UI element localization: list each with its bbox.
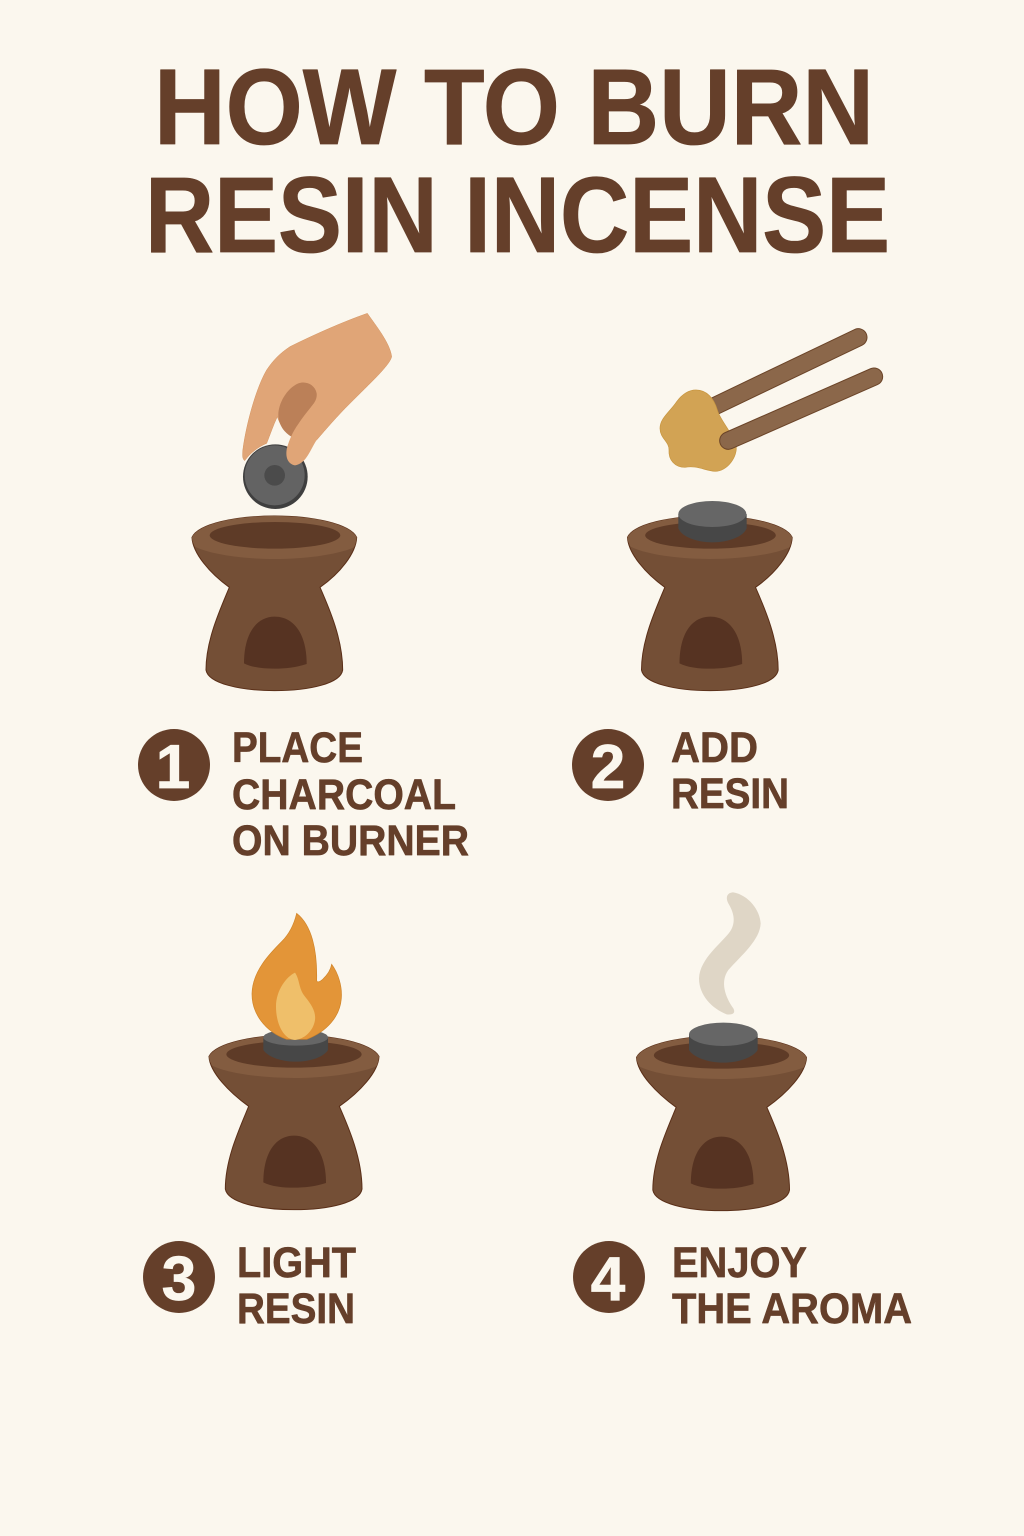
title xyxy=(145,47,890,275)
number badge 3: 3 xyxy=(162,1245,196,1314)
illustration: lit flame on burner xyxy=(209,913,379,1210)
number badge 2 xyxy=(572,729,644,802)
label: add resin xyxy=(671,723,789,817)
number badge 2: 2 xyxy=(591,733,625,802)
label: place charcoal on burner: ON BURNER xyxy=(232,816,469,864)
number badge 4 xyxy=(573,1241,645,1314)
label: enjoy the aroma: ENJOY xyxy=(672,1238,807,1286)
panel: step 2 xyxy=(572,337,874,817)
label: enjoy the aroma: THE AROMA xyxy=(672,1284,912,1332)
label: place charcoal on burner: PLACE xyxy=(232,723,363,771)
panel: step 4 xyxy=(573,892,912,1332)
number badge 1 xyxy=(138,729,210,802)
number badge 3 xyxy=(143,1241,215,1314)
title: HOW TO BURN xyxy=(154,47,874,167)
label: light resin: LIGHT xyxy=(237,1238,356,1286)
label: light resin: RESIN xyxy=(237,1284,355,1332)
label: light resin xyxy=(237,1238,356,1332)
label: place charcoal on burner: CHARCOAL xyxy=(232,770,456,818)
label: add resin: ADD xyxy=(671,723,758,771)
label: add resin: RESIN xyxy=(671,769,789,817)
panel: step 1 xyxy=(138,313,469,864)
illustration: chopsticks adding resin to burner xyxy=(627,337,874,691)
label: enjoy the aroma xyxy=(672,1238,912,1332)
label: place charcoal on burner xyxy=(232,723,469,864)
number badge 1: 1 xyxy=(156,733,190,802)
number badge 4: 4 xyxy=(591,1245,626,1314)
title: RESIN INCENSE xyxy=(145,155,890,275)
illustration: hand placing charcoal on burner xyxy=(192,313,392,691)
panel: step 3 xyxy=(143,913,379,1332)
illustration: smoke rising from burner xyxy=(637,892,806,1211)
